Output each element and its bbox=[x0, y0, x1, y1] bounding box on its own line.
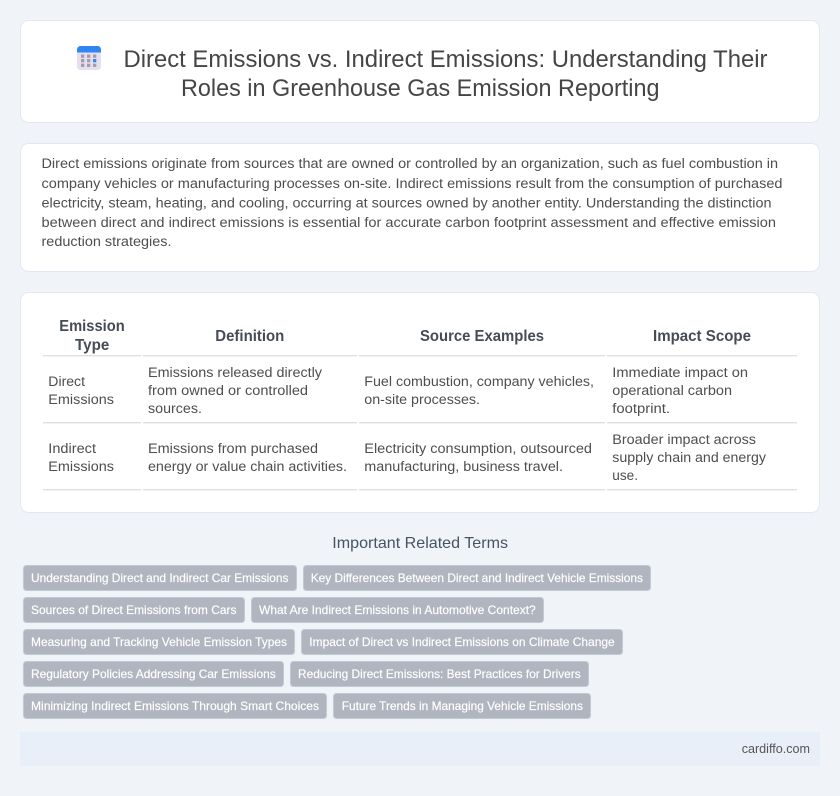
tag: Understanding Direct and Indirect Car Emissions bbox=[31, 571, 288, 585]
tag bbox=[290, 662, 588, 686]
text block: introduction paragraph: reduction strategies. bbox=[42, 234, 172, 250]
table row: indirect emissions: Broader impact across bbox=[612, 432, 756, 448]
text block: introduction paragraph: between direct and indirect emissions is essential for accurate carbon footprint assessment and effective emission bbox=[42, 215, 776, 231]
tag: Minimizing Indirect Emissions Through Smart Choices bbox=[31, 699, 319, 713]
table row: direct emissions: operational carbon bbox=[612, 383, 732, 399]
table row: indirect emissions: Emissions from purchased bbox=[148, 441, 318, 457]
tag bbox=[304, 566, 650, 590]
tag: Key Differences Between Direct and Indirect Vehicle Emissions bbox=[311, 571, 643, 585]
panel: header bbox=[20, 20, 820, 122]
text block: introduction paragraph: electricity, steam, heating, and cooling, occurring at sources owned by another entity. Understanding the distinction bbox=[42, 196, 772, 212]
table header row: Source Examples bbox=[420, 328, 544, 345]
table row: direct emissions: Immediate impact on bbox=[612, 365, 748, 381]
table header row: Impact Scope bbox=[653, 328, 751, 345]
footer bbox=[20, 732, 820, 766]
tag: What Are Indirect Emissions in Automotive Context? bbox=[259, 603, 536, 617]
title: Direct Emissions vs. Indirect Emissions: Understanding Their bbox=[124, 46, 768, 73]
table row: direct emissions: on-site processes. bbox=[364, 392, 480, 408]
table header row bbox=[59, 318, 751, 354]
table row: direct emissions: Emissions released directly bbox=[148, 365, 323, 381]
title bbox=[124, 46, 768, 102]
tag: Measuring and Tracking Vehicle Emission Types bbox=[31, 635, 287, 649]
tag: Sources of Direct Emissions from Cars bbox=[31, 603, 236, 617]
table row: indirect emissions: manufacturing, business travel. bbox=[364, 459, 563, 475]
tag bbox=[24, 662, 284, 686]
table row: direct emissions: Fuel combustion, company vehicles, bbox=[364, 374, 594, 390]
table row: direct emissions: sources. bbox=[148, 401, 202, 417]
text block: introduction paragraph: company vehicles or manufacturing processes on-site. Indirect emissions result from the consumption of purchased bbox=[42, 176, 782, 192]
tag list: related terms bbox=[24, 566, 650, 718]
tag: Future Trends in Managing Vehicle Emissions bbox=[342, 699, 583, 713]
tag bbox=[24, 566, 296, 590]
table row: indirect emissions bbox=[48, 432, 767, 484]
text block: introduction paragraph bbox=[42, 156, 782, 250]
heading: important related terms: Important Related Terms bbox=[332, 535, 508, 552]
icon: calendar bbox=[77, 46, 101, 70]
panel: introduction bbox=[20, 144, 820, 272]
table header row: Emission bbox=[59, 318, 125, 335]
panel: comparison table bbox=[20, 292, 820, 512]
title: Roles in Greenhouse Gas Emission Reporting bbox=[181, 75, 660, 102]
tag bbox=[334, 694, 590, 718]
tag bbox=[24, 694, 326, 718]
footer text: source: cardiffo.com bbox=[742, 741, 810, 756]
table row: indirect emissions: Emissions bbox=[48, 459, 114, 475]
table row: indirect emissions: Electricity consumption, outsourced bbox=[364, 441, 592, 457]
table row: direct emissions: footprint. bbox=[612, 401, 670, 417]
tag bbox=[24, 630, 294, 654]
tag: Impact of Direct vs Indirect Emissions on Climate Change bbox=[309, 635, 615, 649]
tag: Regulatory Policies Addressing Car Emissions bbox=[31, 667, 276, 681]
tag: Reducing Direct Emissions: Best Practices for Drivers bbox=[298, 667, 581, 681]
table header row: Type bbox=[75, 337, 110, 354]
table row: direct emissions: Direct bbox=[48, 374, 85, 390]
table header row: Definition bbox=[215, 328, 284, 345]
text block: introduction paragraph: Direct emissions originate from sources that are owned or controlled by an organization, such as fuel combustion in bbox=[42, 156, 778, 172]
table row: indirect emissions: energy or value chain activities. bbox=[148, 459, 347, 475]
table row: direct emissions bbox=[48, 365, 748, 417]
table row: indirect emissions: Indirect bbox=[48, 441, 96, 457]
table row: indirect emissions: use. bbox=[612, 468, 638, 484]
table row: direct emissions: Emissions bbox=[48, 392, 114, 408]
table row: indirect emissions: supply chain and energy bbox=[612, 450, 767, 466]
tag bbox=[302, 630, 622, 654]
tag bbox=[24, 598, 244, 622]
table row: direct emissions: from owned or controlled bbox=[148, 383, 308, 399]
tag bbox=[252, 598, 544, 622]
